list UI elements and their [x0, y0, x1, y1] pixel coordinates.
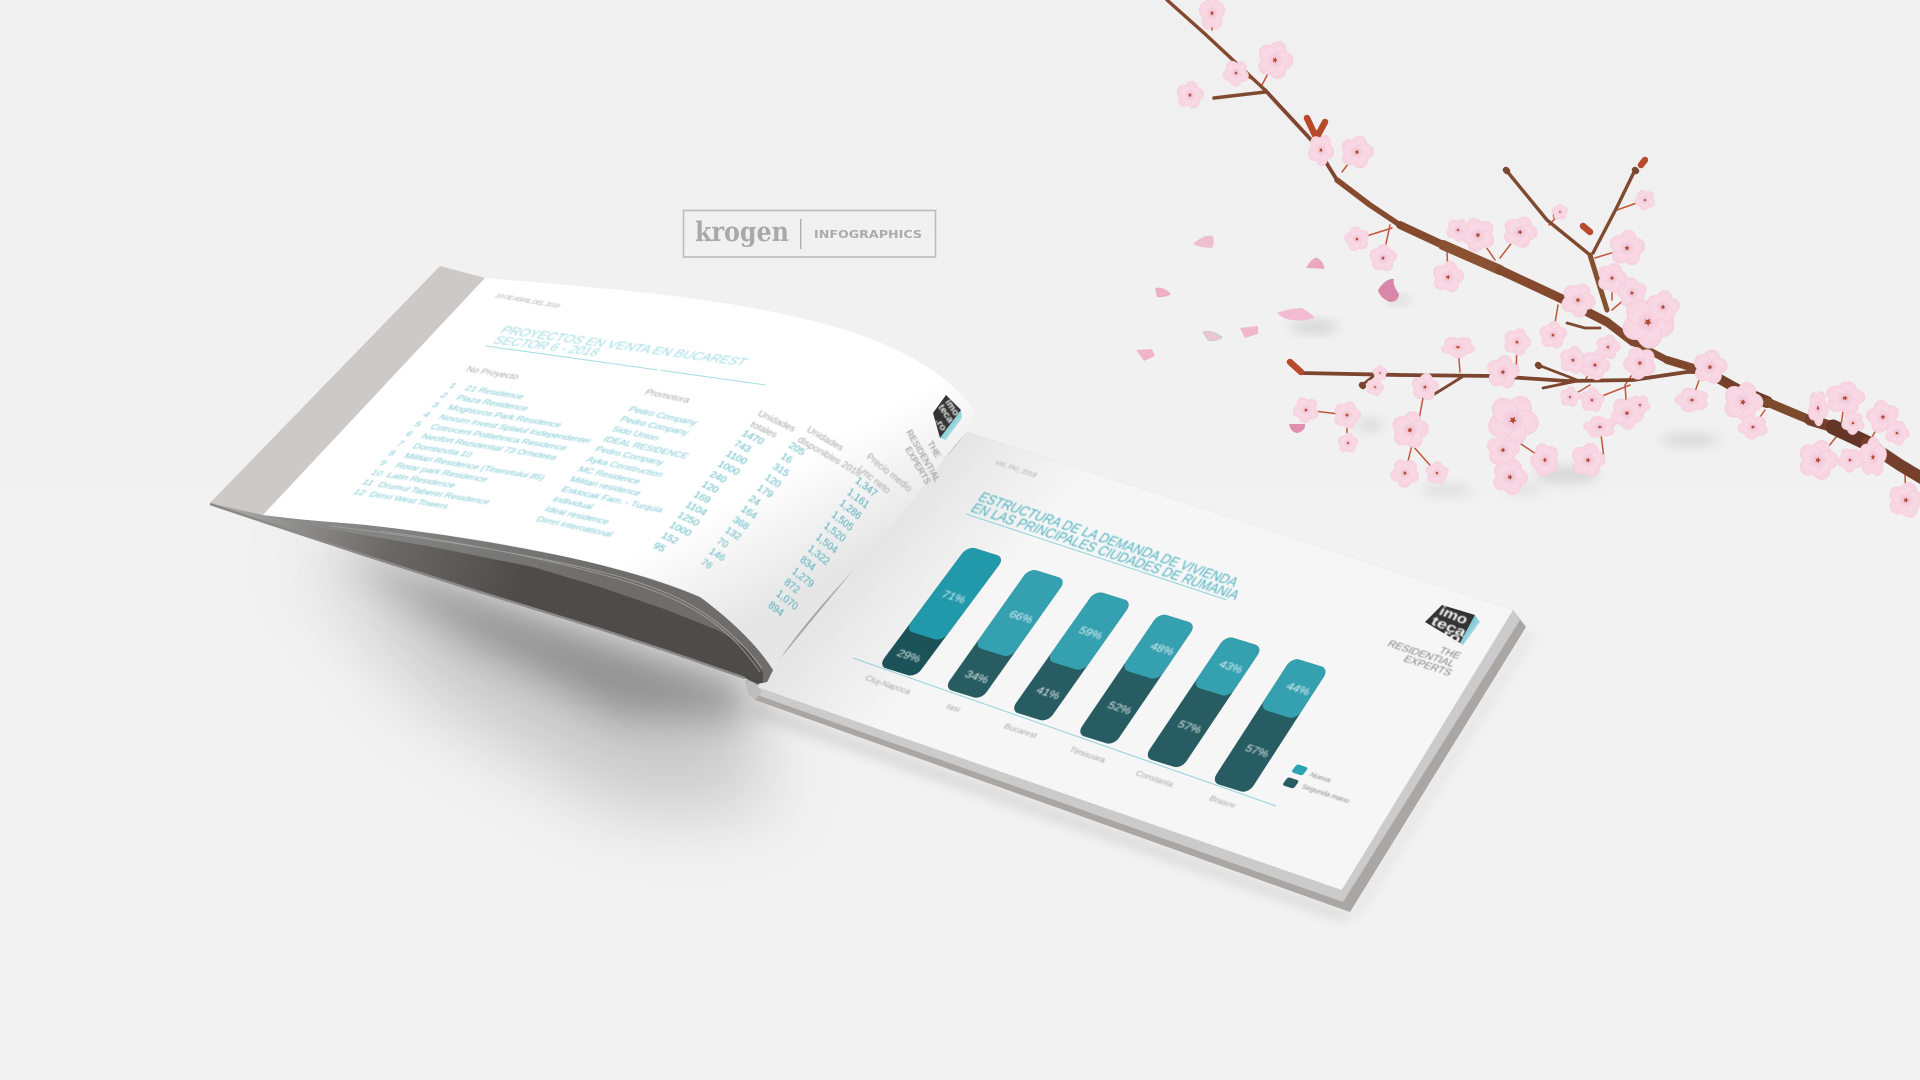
column: project names: Dimri West Towers — [366, 490, 452, 511]
column: total units: 1104 — [683, 500, 709, 518]
column: project names: Dombovita 10 — [410, 442, 475, 460]
column: project names: 5 — [411, 420, 424, 429]
column: project names: 9 — [377, 459, 389, 468]
column: project names: 21 Residence — [462, 384, 527, 402]
krogen logo: krogen — [695, 217, 789, 248]
column: available units: 76 — [698, 557, 715, 572]
tagline, left page: RESIDENTIAL — [904, 428, 942, 484]
tagline, right page: EXPERTS — [1401, 654, 1454, 678]
krogen logo — [684, 210, 936, 257]
column: project names: Drumul Taberei Residence — [375, 481, 492, 507]
column: project names: 6 — [403, 430, 415, 439]
right page of the brochure — [745, 432, 1526, 912]
spine cover strip — [210, 266, 485, 515]
krogen logo: INFOGRAPHICS — [814, 229, 922, 241]
bar value labels: 57% — [1242, 743, 1271, 760]
column: project names: 11 — [359, 478, 376, 488]
table title: PROYECTOS EN VENTA EN BUCAREST — [497, 323, 752, 368]
column: available units: 205 — [786, 441, 807, 458]
column: project names: Rotar park Residence — [392, 461, 490, 484]
column: developers: Militari residence — [567, 475, 644, 498]
table headers: totales — [748, 420, 780, 440]
column: project names: 1 — [446, 381, 459, 391]
page block edge — [757, 432, 1520, 902]
column: total units: 169 — [691, 490, 713, 506]
bar: Bucarest — [1011, 590, 1132, 722]
column: available units: 368 — [730, 515, 751, 533]
sheet lines — [330, 526, 762, 672]
column: average price: 834 — [798, 554, 817, 574]
bar value labels: 66% — [1006, 609, 1035, 626]
table headers: disponibles 2018 — [795, 435, 864, 479]
flower stems — [1212, 13, 1906, 500]
city labels: Constanta — [1133, 769, 1176, 789]
bar value labels: 71% — [939, 589, 968, 606]
tagline, left page: EXPERTS — [903, 445, 933, 486]
column: available units: 179 — [754, 483, 775, 501]
legend — [1282, 764, 1352, 805]
bar value labels: 48% — [1147, 641, 1176, 658]
page date: 19 DE ABRIL DEL 2018 — [493, 292, 563, 310]
bar value labels — [894, 589, 1312, 760]
imoteca logo, right page: imo — [1436, 603, 1471, 627]
main bough — [1167, 0, 1265, 90]
imoteca logo, left page: .ro — [933, 417, 949, 433]
column: total units: 1100 — [723, 449, 750, 467]
column: developers: Sido Union — [609, 425, 661, 443]
city labels: Timisoara — [1067, 745, 1109, 764]
column: average price: 1,504 — [813, 532, 840, 557]
table headers: Promotora — [642, 388, 693, 405]
column: developers: individual — [550, 495, 596, 512]
chart title: EN LAS PRINCIPALES CIUDADES DE RUMANIA — [967, 501, 1243, 603]
column: average price: 1,322 — [805, 543, 832, 568]
column: project names: 2 — [438, 391, 450, 400]
column: project names: Novum Invest Splaiul Independentei — [436, 413, 593, 446]
bar value labels: 29% — [894, 648, 923, 665]
city labels: Cluj-Napoca — [863, 673, 914, 696]
column: available units: 24 — [746, 494, 763, 508]
column: average price: 1,161 — [845, 487, 871, 512]
upper twigs — [1506, 170, 1590, 255]
cherry blossoms — [1173, 0, 1920, 524]
column: project names: 4 — [420, 411, 433, 420]
title rule — [966, 514, 1227, 600]
column: project names: Militari Residence (Tineretului 85) — [401, 452, 548, 483]
column: project names: Cotroceni Politehnica Residence — [427, 423, 570, 453]
bar value labels: 43% — [1216, 659, 1245, 676]
column: developers: MC Residence — [575, 465, 643, 486]
column: project names: 8 — [385, 449, 398, 458]
column: available units — [698, 441, 807, 575]
curved page surface — [263, 278, 975, 670]
city labels: Bucarest — [1002, 721, 1040, 740]
column: project names: 12 — [350, 488, 368, 498]
table headers: No Proyecto — [463, 365, 522, 382]
bar chart — [878, 546, 1329, 794]
bar value labels: 59% — [1076, 625, 1105, 642]
hinge detail — [745, 680, 762, 700]
column: project names — [350, 381, 619, 523]
hard cover — [745, 432, 1526, 912]
fallen petals — [1136, 236, 1410, 433]
imoteca logo, left page — [933, 395, 962, 440]
column: project names: Plaza Residence — [453, 394, 531, 413]
chart title: ESTRUCTURA DE LA DEMANDA DE VIVIENDA — [975, 490, 1242, 590]
sheet stack — [263, 515, 773, 682]
column: average price: 872 — [782, 577, 801, 597]
book ground shadow — [300, 545, 1534, 922]
table headers: Precio medio — [864, 451, 914, 495]
bar: Cluj-Napoca — [878, 546, 1005, 678]
imoteca logo, left page: imo — [943, 398, 961, 418]
column: total units: 95 — [650, 541, 668, 555]
bar value labels: 34% — [962, 669, 991, 686]
column: available units: 132 — [722, 525, 743, 543]
imoteca logo, left page: teca — [936, 403, 956, 426]
column: total units: 743 — [731, 439, 753, 455]
column: total units: 240 — [707, 470, 729, 486]
column: available units: 315 — [770, 462, 791, 480]
imoteca logo, right page: teca — [1428, 613, 1470, 640]
page date: VIII, FKI, 2018 — [993, 460, 1038, 479]
column: average price — [766, 475, 879, 625]
inside of back cover under the curled pages — [210, 503, 773, 684]
column: available units: 146 — [706, 547, 727, 564]
flower shadows on the surface — [1356, 420, 1720, 494]
lower bough — [1301, 372, 1707, 381]
chart baseline — [853, 658, 1276, 806]
column: developers: IDEAL RESIDENCE — [600, 435, 691, 461]
tagline, right page: RESIDENTIAL — [1385, 639, 1457, 669]
column: available units: 70 — [714, 536, 731, 551]
city labels — [863, 673, 1239, 810]
column: total units: 152 — [659, 531, 681, 547]
bar: Timisoara — [1077, 613, 1196, 746]
twig tips and red buds — [1362, 170, 1636, 386]
left page of the brochure — [210, 266, 975, 700]
bar value labels: 57% — [1175, 719, 1204, 736]
column: project names: Moghioros Park Residence — [445, 403, 564, 430]
column: developers: Pedro Company — [626, 405, 700, 428]
bar value labels: 41% — [1033, 685, 1062, 702]
tagline, right page: THE — [1436, 646, 1463, 661]
column: average price: 894 — [766, 600, 786, 619]
column: available units: 16 — [778, 451, 795, 466]
column: average price: 1,347 — [853, 475, 879, 500]
column: developers: Pedro Company — [617, 415, 692, 438]
title rule — [486, 346, 766, 385]
column: average price: 1,070 — [774, 588, 800, 613]
cover edge line — [210, 504, 745, 678]
column: total units: 1000 — [715, 459, 742, 478]
column: developers: Ayka Construction — [584, 455, 666, 479]
column: project names: Neofort Rezidential 73 Orhideea — [418, 432, 560, 462]
table headers: / mc neto — [855, 463, 892, 497]
table headers — [463, 365, 914, 497]
table headers: Unidades — [804, 425, 846, 454]
column: developers: Pedro Company — [592, 445, 666, 468]
column: developers — [533, 405, 734, 545]
table title: SECTOR 6 - 2018 — [490, 333, 604, 358]
column: total units — [650, 429, 766, 560]
bar: Constanta — [1144, 636, 1263, 769]
column: average price: 1,520 — [821, 520, 847, 545]
legend: Segunda mano — [1300, 782, 1352, 805]
column: available units: 164 — [738, 504, 759, 522]
imoteca logo, right page: .ro — [1434, 624, 1465, 646]
column: project names: 7 — [394, 440, 407, 449]
column: available units: 120 — [762, 472, 783, 490]
bar: Iasi — [944, 568, 1066, 700]
column: total units: 1000 — [667, 521, 694, 539]
page surface — [757, 432, 1513, 890]
city labels: Brasov — [1207, 794, 1239, 810]
column: average price: 1,279 — [790, 566, 816, 591]
column: project names: 3 — [429, 401, 441, 410]
table headers: Unidades — [755, 409, 798, 434]
tagline, left page: THE — [925, 439, 943, 460]
column: developers: Eskiocak Fam. - Turquia — [558, 485, 666, 515]
bar value labels: 52% — [1105, 700, 1134, 717]
legend: Nueva — [1308, 770, 1334, 784]
bar value labels: 44% — [1283, 681, 1312, 698]
column: total units: 1250 — [675, 510, 702, 529]
bar: Brasov — [1211, 657, 1329, 794]
column: total units: 120 — [699, 480, 721, 496]
imoteca logo, right page — [1425, 603, 1480, 646]
column: project names: 10 — [368, 469, 386, 478]
column: total units: 1470 — [739, 429, 766, 447]
city labels: Iasi — [944, 702, 963, 714]
column: project names: Latin Residence — [384, 471, 458, 490]
column: average price: 1,505 — [829, 509, 855, 534]
column: average price: 1,286 — [837, 498, 863, 523]
column: developers: Dimri international — [533, 515, 615, 539]
cherry branch — [1167, 0, 1920, 500]
column: developers: Ideal residence — [542, 505, 612, 527]
